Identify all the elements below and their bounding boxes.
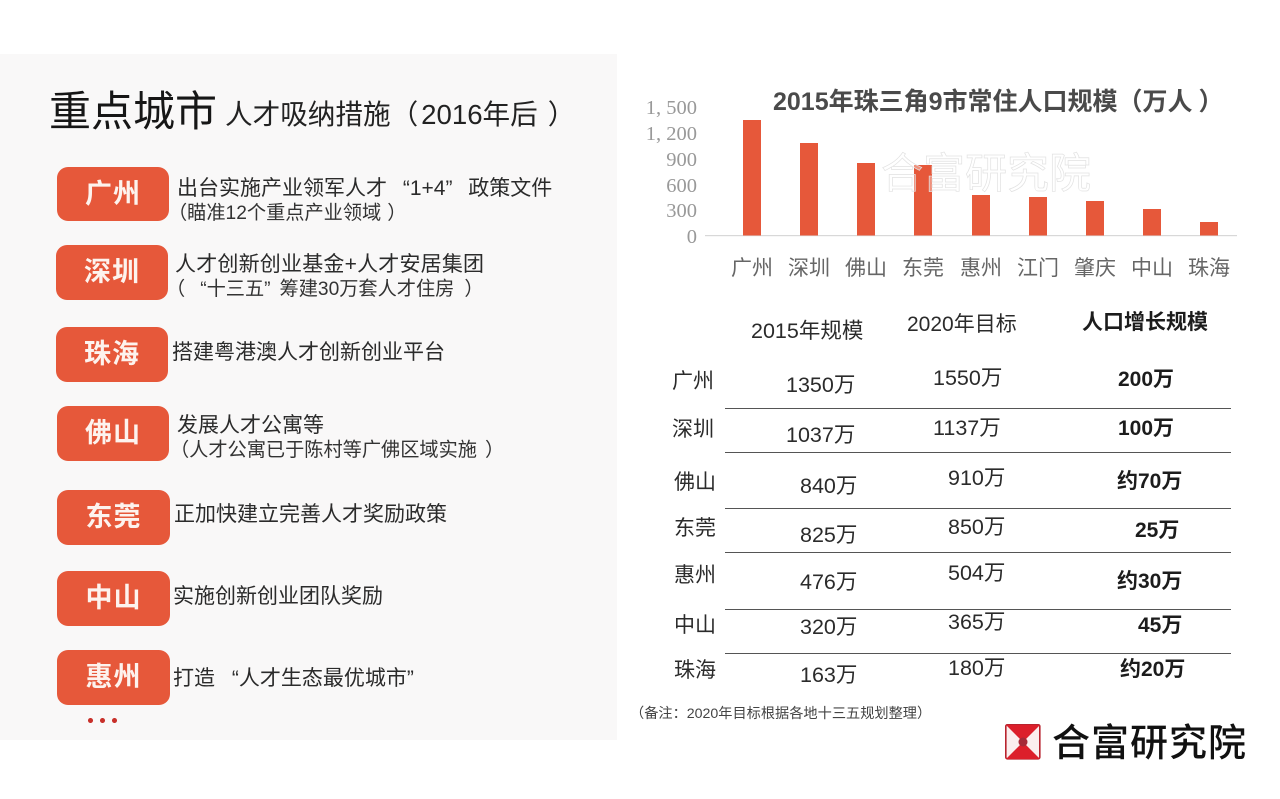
- city badge: 东莞: [57, 490, 170, 545]
- x axis labels: 珠海: [1188, 257, 1230, 280]
- 深圳 2020: 1137万: [933, 416, 1001, 440]
- y axis labels: 0: [687, 226, 697, 248]
- 珠海 2015: 163万: [800, 663, 857, 687]
- row: 东莞: 东莞: [674, 517, 716, 540]
- 惠州 2020: 504万: [948, 561, 1005, 585]
- measure: 珠海: 搭建粤港澳人才创新创业平台: [172, 341, 445, 364]
- x axis labels: [731, 257, 1230, 280]
- 广州 growth: 200万: [1118, 368, 1174, 391]
- y axis labels: 300: [666, 200, 697, 222]
- x axis labels: 中山: [1131, 257, 1173, 280]
- panel: talent measures: [0, 54, 617, 740]
- 东莞 2015: 825万: [800, 523, 857, 547]
- city badge: 深圳: [56, 245, 168, 300]
- column header: 2020: 2020年目标: [907, 313, 1017, 336]
- city badge: 东莞: 东莞: [86, 502, 142, 532]
- note: 广州: （瞄准12个重点产业领域 ）: [168, 203, 406, 224]
- row: 佛山: 佛山: [674, 471, 716, 494]
- x axis labels: 江门: [1017, 257, 1059, 280]
- 惠州 growth: 约30万: [1117, 570, 1182, 593]
- watermark: 合富研究院: [881, 150, 1091, 197]
- 佛山 2015: 840万: [800, 474, 857, 498]
- x axis labels: 深圳: [788, 257, 830, 280]
- 惠州 2015: 476万: [800, 570, 857, 594]
- city badge: 深圳: 深圳: [84, 257, 140, 287]
- city badge: 广州: 广州: [85, 179, 141, 209]
- y axis labels: [646, 97, 697, 248]
- x axis labels: 佛山: [845, 257, 887, 280]
- row: 中山: 中山: [674, 614, 716, 637]
- x axis labels: 肇庆: [1074, 257, 1116, 280]
- measure: 广州: 出台实施产业领军人才 “1+4” 政策文件: [177, 177, 552, 200]
- x axis labels: 惠州: [960, 257, 1002, 280]
- note: 佛山: （人才公寓已于陈村等广佛区域实施 ）: [170, 440, 504, 461]
- chart title: 2015年珠三角9市常住人口规模（万人）: [773, 88, 1224, 116]
- 东莞 2020: 850万: [948, 515, 1005, 539]
- 深圳 2015: 1037万: [786, 423, 855, 447]
- axis line: [705, 235, 1237, 236]
- city badge: 中山: [57, 571, 170, 626]
- 佛山 2020: 910万: [948, 466, 1005, 490]
- bars: [743, 120, 1218, 236]
- y axis labels: 900: [666, 149, 697, 171]
- 中山 2015: 320万: [800, 615, 857, 639]
- measure: 惠州: 打造 “人才生态最优城市”: [173, 667, 414, 690]
- 深圳 growth: 100万: [1118, 417, 1174, 440]
- measure: 佛山: 发展人才公寓等: [177, 414, 324, 437]
- 珠海 growth: 约20万: [1120, 658, 1185, 681]
- row: 深圳: 深圳: [672, 418, 714, 441]
- city badge: 珠海: [56, 327, 168, 382]
- city badge: 佛山: 佛山: [85, 418, 141, 448]
- row: 珠海: 珠海: [674, 659, 716, 682]
- ellipsis dots: [88, 718, 118, 723]
- logo text: 合富研究院: [1052, 723, 1247, 765]
- 珠海 2020: 180万: [948, 656, 1005, 680]
- sub heading: 人才吸纳措施（2016年后 ）: [225, 99, 575, 130]
- row: 惠州: 惠州: [674, 564, 716, 587]
- city badge: 广州: [57, 167, 169, 221]
- column header: 2015: 2015年规模: [751, 319, 863, 343]
- main heading: 重点城市: [49, 88, 217, 135]
- 广州 2015: 1350万: [786, 373, 855, 397]
- 东莞 growth: 25万: [1135, 519, 1179, 542]
- x axis labels: 东莞: [902, 257, 944, 280]
- y axis labels: 600: [666, 175, 697, 197]
- measure: 中山: 实施创新创业团队奖励: [173, 585, 383, 608]
- city badge: 佛山: [57, 406, 169, 461]
- footnote: （备注：2020年目标根据各地十三五规划整理）: [630, 706, 931, 722]
- 中山 2020: 365万: [948, 610, 1005, 634]
- measure: 深圳: 人才创新创业基金+人才安居集团: [175, 253, 484, 276]
- 佛山 growth: 约70万: [1117, 470, 1182, 493]
- x axis labels: 广州: [731, 257, 773, 280]
- city badge: 惠州: [57, 650, 170, 705]
- city badge: 中山: 中山: [86, 583, 142, 613]
- y axis labels: 1, 200: [646, 123, 697, 145]
- icon: logo mark: [1005, 724, 1041, 760]
- column header: growth: 人口增长规模: [1082, 311, 1208, 334]
- row: 广州: 广州: [672, 370, 714, 393]
- city badge: 珠海: 珠海: [84, 339, 140, 369]
- city badge: 惠州: 惠州: [86, 662, 142, 692]
- measure: 东莞: 正加快建立完善人才奖励政策: [174, 503, 447, 526]
- y axis labels: 1, 500: [646, 97, 697, 119]
- 中山 growth: 45万: [1138, 614, 1182, 637]
- 广州 2020: 1550万: [933, 366, 1002, 390]
- note: 深圳: （ “十三五” 筹建30万套人才住房 ）: [166, 279, 484, 300]
